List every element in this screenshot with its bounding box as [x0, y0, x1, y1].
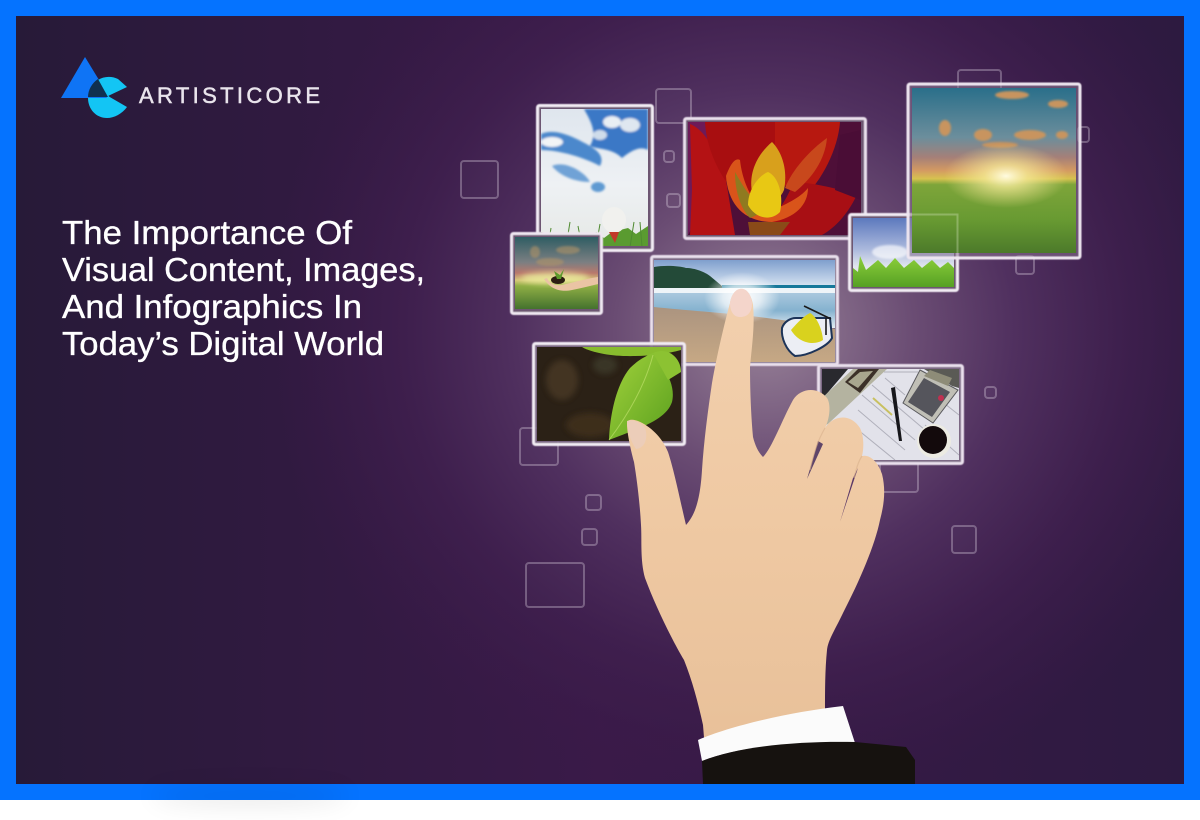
logo wordmark: ARTISTICORE	[139, 83, 320, 108]
photo card: beach with jet ski	[652, 256, 838, 364]
ring finger edge shading	[810, 428, 862, 478]
floating ghost squares	[461, 70, 1089, 607]
suit jacket sleeve	[702, 742, 915, 784]
photo card: green leaf on soil	[534, 344, 684, 444]
logo mark	[61, 57, 127, 118]
fingernail: index	[730, 289, 752, 317]
logo	[61, 57, 320, 118]
fingernail: thumb	[627, 420, 646, 449]
title: The Importance Of	[62, 215, 353, 252]
gap between ring and little fingers	[840, 468, 858, 522]
title: Visual Content, Images,	[62, 252, 425, 289]
shirt cuff	[698, 706, 855, 761]
soft shadow below border	[150, 787, 350, 805]
photo card: hand holding plant	[512, 234, 602, 314]
overlapping frame of small grass card	[912, 214, 958, 253]
title: Today’s Digital World	[62, 326, 384, 363]
photo card: desk with calculator and coffee	[818, 366, 962, 464]
illustrated hand pointing	[627, 289, 884, 750]
gap between middle and ring fingers	[807, 441, 823, 479]
photo card: sunset over meadow	[908, 84, 1080, 258]
title	[62, 215, 425, 363]
photo card: golf ball and sky	[538, 106, 652, 250]
photo card: small grass and sky	[850, 214, 958, 290]
title: And Infographics In	[62, 289, 362, 326]
photo card: red flower	[684, 118, 866, 238]
